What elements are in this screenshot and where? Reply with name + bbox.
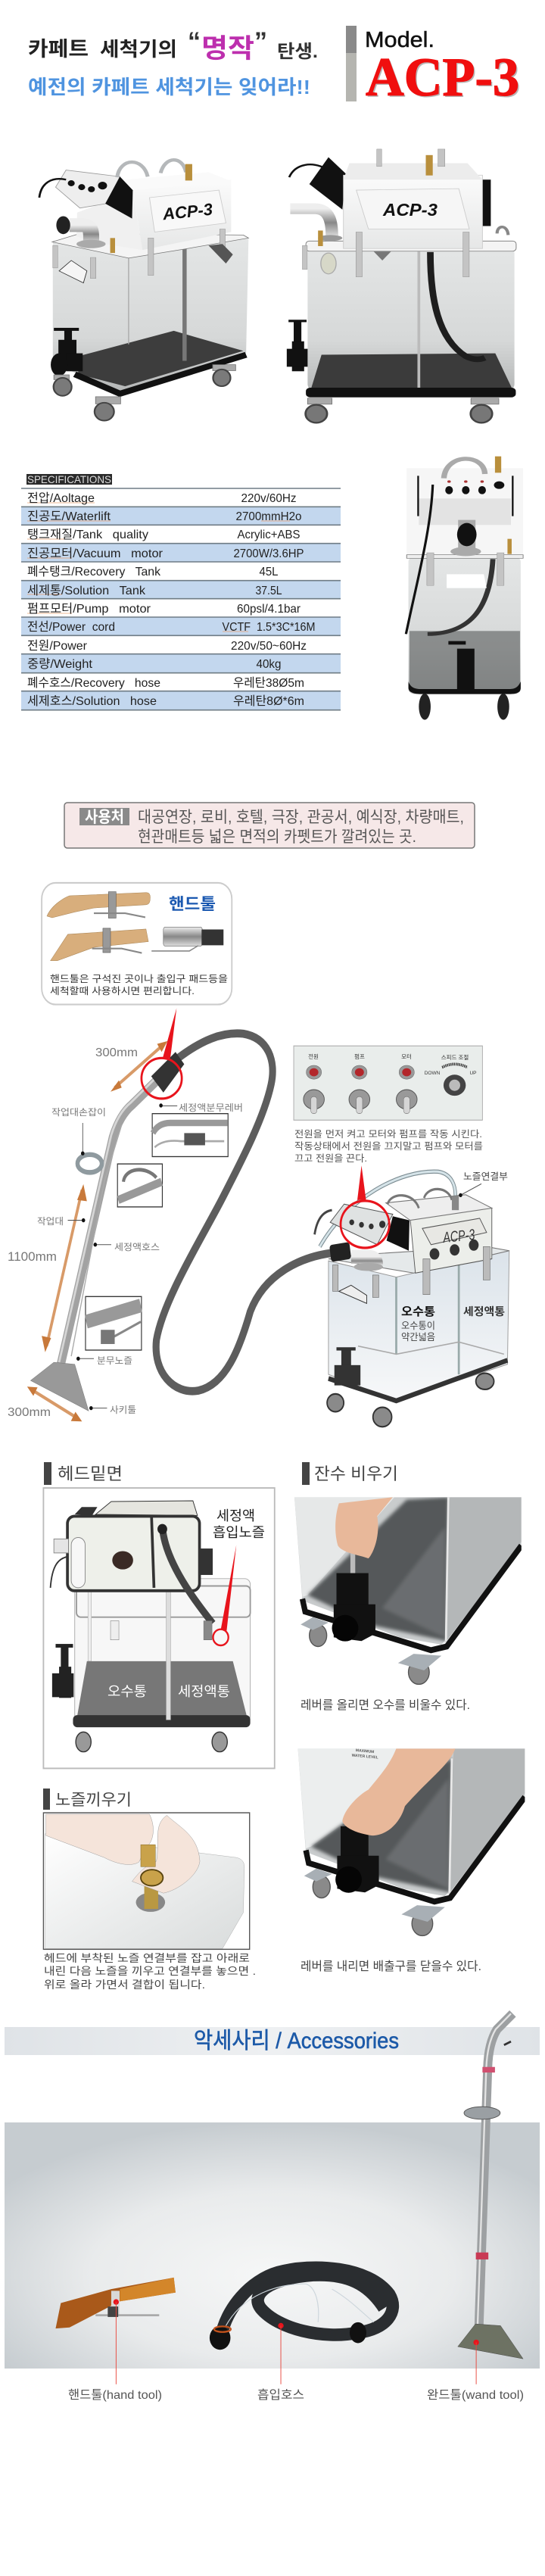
accessories title band: 악세사리 / Accessories bbox=[194, 2029, 399, 2054]
length arrows bbox=[27, 1041, 167, 1421]
specifications title: SPECIFICATIONS bbox=[27, 473, 111, 485]
subheading: forget old carpet cleaners: 예전의 카페트 세척기는 잊어라!! bbox=[28, 76, 310, 98]
caption: lever down: 레버를 내리면 배출구를 닫을수 있다. bbox=[301, 1960, 481, 1973]
max water level marking: WATER LEVEL bbox=[351, 1753, 378, 1760]
model badge: ACP-3 bbox=[366, 47, 519, 108]
spec rows: 37.5L bbox=[256, 585, 282, 597]
max water level marking bbox=[351, 1748, 378, 1760]
spec rows: 세제호스/Solution hose bbox=[27, 694, 157, 708]
hose bbox=[156, 1034, 334, 1391]
label: ACP-3 on machine: ACP-3 bbox=[161, 200, 213, 223]
tank labels: 오수통이 bbox=[401, 1321, 435, 1331]
diagram labels: 분무노즐 bbox=[97, 1355, 132, 1366]
grip bbox=[151, 1052, 184, 1093]
heading: head underside: 헤드밑면 bbox=[58, 1464, 123, 1483]
spec rows: VCTF 1.5*3C*16M bbox=[223, 621, 315, 634]
usage text: 현관매트등 넓은 면적의 카펫트가 깔려있는 곳. bbox=[138, 828, 416, 846]
heading: masterpiece slogan: 카페트 bbox=[28, 38, 89, 61]
heading: head underside bbox=[44, 1462, 123, 1485]
insets bbox=[86, 1114, 228, 1350]
spec rows: 전선/Power cord bbox=[27, 620, 115, 634]
wand tube bbox=[61, 1062, 176, 1364]
accessories title band bbox=[5, 2027, 540, 2055]
fitting nozzle description bbox=[44, 1952, 256, 1991]
panel labels bbox=[308, 1053, 477, 1076]
diagram labels: 세정액분무레버 bbox=[179, 1102, 243, 1113]
wand and hose diagram bbox=[27, 1008, 334, 1421]
max water level marking: MAXIMUM bbox=[356, 1748, 375, 1754]
spec rows: 전원/Power bbox=[27, 639, 88, 653]
fitting nozzle description: 내린 다음 노즐을 끼우고 연결부를 놓으면 . bbox=[44, 1965, 256, 1977]
tank labels bbox=[107, 1684, 230, 1699]
usage text: 대공연장, 로비, 호텔, 극장, 관공서, 예식장, 차량매트, bbox=[138, 809, 464, 826]
accessory labels: 완드툴(wand tool) bbox=[427, 2388, 524, 2402]
tank labels: 약간넓음 bbox=[401, 1331, 435, 1343]
panel labels: UP bbox=[469, 1071, 477, 1076]
diagram labels: 300mm bbox=[8, 1406, 51, 1419]
nozzle label: 세정액 bbox=[216, 1508, 255, 1523]
tank labels: 노즐연결부 bbox=[463, 1171, 508, 1182]
specifications table bbox=[21, 488, 341, 710]
diagram labels: 사키툴 bbox=[110, 1405, 136, 1415]
panel: fitting nozzle illustration bbox=[43, 1813, 250, 1949]
spec rows: 진공모터/Vacuum motor bbox=[27, 547, 164, 560]
photo: lever down bbox=[298, 1748, 525, 1935]
tank labels: 세정액통 bbox=[463, 1305, 505, 1318]
nozzle label bbox=[213, 1508, 265, 1540]
spec rows: 40kg bbox=[256, 658, 282, 671]
photo: machine angled view bbox=[39, 160, 248, 421]
diagram labels: 작업대손잡이 bbox=[51, 1107, 106, 1118]
panel labels: 스피드 조절 bbox=[441, 1054, 469, 1061]
tank labels: 오수통 bbox=[401, 1305, 435, 1318]
accessories photo band bbox=[5, 2122, 540, 2369]
spec rows: 폐수탱크/Recovery Tank bbox=[27, 565, 161, 579]
spec rows: 220v/60Hz bbox=[241, 492, 297, 505]
accessory labels bbox=[68, 2388, 524, 2402]
diagram labels: 300mm bbox=[95, 1046, 138, 1059]
model label: ACP-3 bbox=[442, 1227, 475, 1246]
control panel instructions: 끄고 전원을 끈다. bbox=[294, 1153, 367, 1164]
spec rows: 45L bbox=[259, 566, 279, 579]
tank labels: 오수통 bbox=[107, 1684, 147, 1699]
spec rows: Acrylic+ABS bbox=[238, 529, 300, 541]
callout: hand tool bbox=[42, 883, 232, 1005]
spec rows: 진공도/Waterlift bbox=[27, 510, 111, 523]
spec rows: 60psl/4.1bar bbox=[237, 603, 301, 616]
control panel instructions: 작동상태에서 전원을 끄지말고 펌프와 모터를 bbox=[294, 1141, 483, 1152]
accessory: suction hose bbox=[210, 2268, 393, 2384]
accessory labels: 흡입호스 bbox=[257, 2388, 304, 2402]
heading: drain residual water: 잔수 비우기 bbox=[314, 1464, 398, 1483]
model badge bbox=[346, 26, 521, 109]
caption: lever up: 레버를 올리면 오수를 비울수 있다. bbox=[301, 1698, 470, 1712]
photo: machine front view bbox=[287, 149, 516, 423]
spec rows: 폐수호스/Recovery hose bbox=[27, 676, 160, 690]
photo: machine rear view bbox=[406, 457, 523, 720]
spec rows bbox=[27, 491, 315, 708]
hand tool description: 세척할때 사용하시면 편리합니다. bbox=[50, 986, 195, 996]
spec rows: 세제통/Solution Tank bbox=[27, 584, 146, 597]
nozzle label: 흡입노즐 bbox=[213, 1525, 265, 1540]
fitting nozzle description: 위로 올라 가면서 결합이 됩니다. bbox=[44, 1979, 205, 1991]
diagram labels: 세정액호스 bbox=[114, 1242, 160, 1252]
spec rows: 탱크재질/Tank quality bbox=[27, 528, 148, 541]
model badge: Model. bbox=[365, 28, 434, 52]
heading: fitting nozzle: 노즐끼우기 bbox=[55, 1792, 132, 1809]
diagram labels: 작업대 bbox=[37, 1216, 64, 1227]
label: ACP-3 on machine: ACP-3 bbox=[382, 200, 438, 220]
hand tool description bbox=[50, 973, 228, 996]
photo: lever up bbox=[294, 1497, 522, 1684]
usage box bbox=[64, 803, 475, 848]
panel: head underside illustration bbox=[43, 1488, 275, 1768]
spec rows: 우레탄38Ø5m bbox=[233, 676, 304, 690]
heading: masterpiece slogan: “ bbox=[188, 27, 201, 56]
heading: masterpiece slogan: ” bbox=[254, 27, 267, 56]
heading: masterpiece slogan bbox=[28, 27, 318, 64]
diagram labels: 1100mm bbox=[8, 1249, 57, 1264]
spec rows: 우레탄8Ø*6m bbox=[233, 694, 304, 708]
nozzle head bbox=[30, 1362, 89, 1411]
control panel instructions: 전원을 먼저 켜고 모터와 펌프를 작동 시킨다. bbox=[294, 1129, 482, 1140]
handle ring bbox=[77, 1155, 102, 1172]
heading: fitting nozzle bbox=[43, 1789, 132, 1810]
spec rows: 펌프모터/Pump motor bbox=[27, 602, 151, 616]
hand tool description: 핸드툴은 구석진 곳이나 출입구 패드등을 bbox=[50, 973, 228, 984]
spec rows: 220v/50~60Hz bbox=[231, 640, 307, 653]
tank labels: 세정액통 bbox=[178, 1684, 230, 1699]
model badge: ACP-3 bbox=[367, 48, 521, 109]
spec rows: 전압/Aoltage bbox=[27, 491, 95, 505]
fitting nozzle description: 헤드에 부착된 노즐 연결부를 잡고 아래로 bbox=[44, 1952, 250, 1964]
spec rows: 중량/Weight bbox=[27, 657, 93, 671]
accessory: wand tool bbox=[458, 2013, 523, 2384]
illustration: machine bbox=[315, 1165, 509, 1427]
usage label: 사용처 bbox=[85, 809, 124, 826]
heading: masterpiece slogan: 탄생. bbox=[277, 42, 318, 62]
red circle and pointer bbox=[142, 1008, 182, 1099]
spec rows: 2700W/3.6HP bbox=[233, 547, 304, 560]
hand tool title: 핸드툴 bbox=[169, 896, 216, 913]
diagram labels bbox=[8, 1046, 243, 1419]
spec rows: 2700mmH2o bbox=[236, 510, 302, 523]
heading: masterpiece slogan: 세척기의 bbox=[100, 38, 177, 61]
accessory: hand tool bbox=[55, 2278, 176, 2384]
panel labels: DOWN bbox=[425, 1071, 441, 1076]
panel labels: 모터 bbox=[401, 1053, 412, 1060]
heading: masterpiece slogan: 명작 bbox=[201, 34, 254, 64]
accessory labels: 핸드툴(hand tool) bbox=[68, 2388, 162, 2402]
panel labels: 펌프 bbox=[354, 1053, 365, 1060]
usage text bbox=[138, 809, 464, 846]
control panel bbox=[294, 1046, 482, 1120]
tank labels bbox=[401, 1171, 508, 1343]
panel labels: 전원 bbox=[308, 1053, 319, 1060]
control panel instructions bbox=[294, 1129, 483, 1164]
